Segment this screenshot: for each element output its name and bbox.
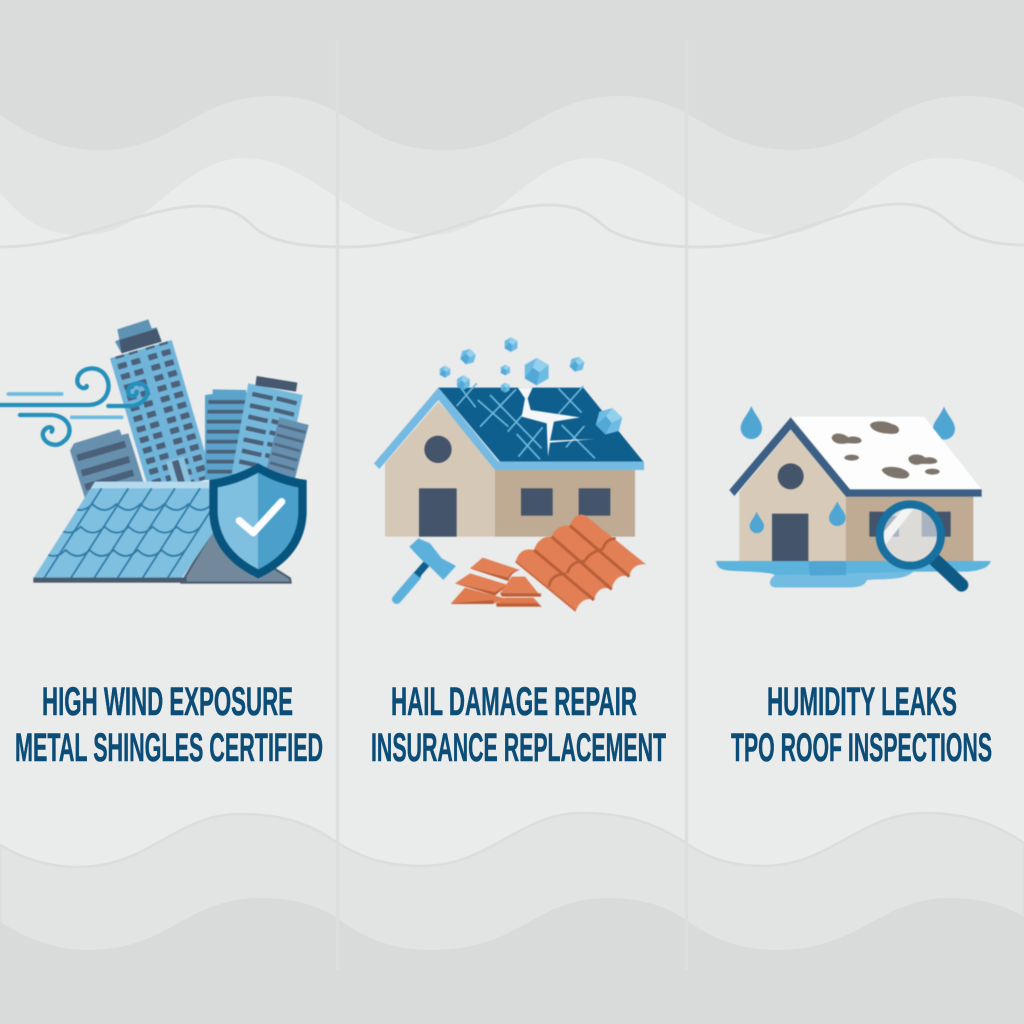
icon: leaking house with magnifier (716, 406, 991, 587)
caption: column 2 (371, 680, 666, 770)
shingled roof (33, 482, 236, 583)
house body (739, 430, 973, 562)
stacked tile row (516, 515, 646, 611)
icon: terracotta tiles (451, 515, 646, 611)
bottom wave: mid band (0, 813, 1024, 1024)
caption: column 2: HAIL DAMAGE REPAIR (391, 680, 637, 724)
gable (182, 530, 291, 583)
front small building (266, 417, 309, 478)
right building (232, 376, 303, 480)
icon: hail damaged house with hammer (374, 337, 644, 599)
wall water drops (750, 501, 846, 533)
water drops outside (741, 406, 955, 440)
stained white roof (729, 417, 982, 497)
tall tower (110, 319, 212, 496)
back left building (70, 429, 143, 498)
small tile pile (451, 558, 542, 607)
magnifying glass (877, 504, 962, 585)
house walls (385, 402, 635, 537)
wind swirls (0, 368, 147, 445)
column dividers (338, 40, 686, 970)
top wave: dark band (0, 0, 1024, 150)
shield with check (209, 463, 307, 578)
top wave: mid band (0, 0, 1024, 235)
flood water (716, 561, 991, 587)
icon: wind, buildings, roof and shield (0, 319, 309, 583)
caption: column 1: HIGH WIND EXPOSURE (42, 680, 293, 724)
hailstones (440, 337, 624, 438)
caption: column 1: METAL SHINGLES CERTIFIED (15, 726, 323, 770)
caption: column 3 (731, 680, 992, 770)
middle building (205, 389, 247, 480)
top wave: line (0, 204, 1024, 247)
hammer (397, 538, 456, 599)
caption: column 1 (15, 680, 323, 770)
caption: column 2: INSURANCE REPLACEMENT (371, 726, 666, 770)
cracked blue roof (374, 383, 644, 470)
bottom wave: dark band (0, 898, 1024, 1024)
